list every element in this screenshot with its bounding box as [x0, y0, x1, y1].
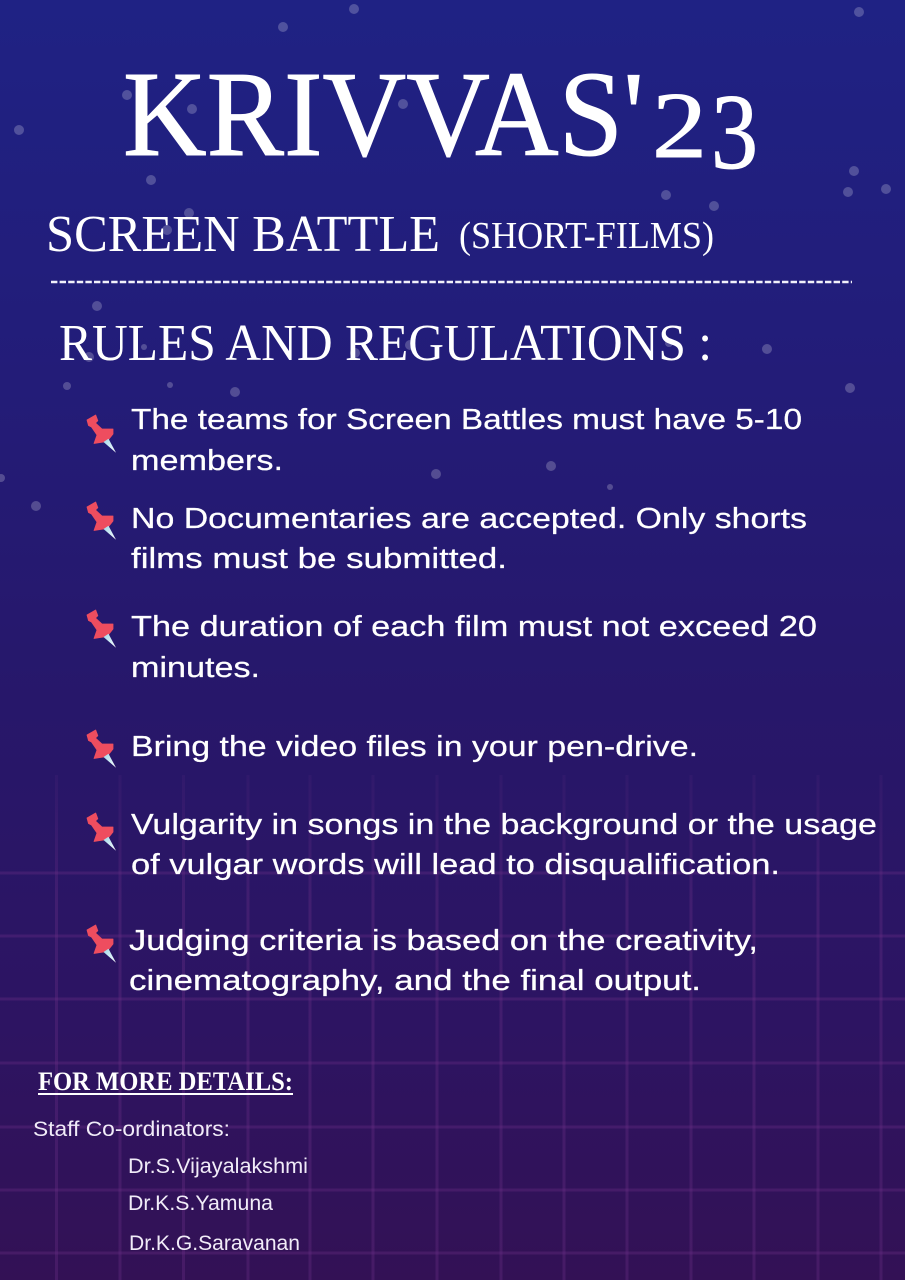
rule 3: The duration of each film must not exceed 20 — [131, 611, 817, 643]
background dots — [0, 4, 891, 511]
staff coordinators: Dr.K.G.Saravanan — [129, 1232, 300, 1255]
rule 1: The teams for Screen Battles must have 5-10 — [131, 404, 802, 436]
subtitle: screen battle — [46, 206, 714, 263]
rule 6: cinematography, and the final output. — [129, 965, 701, 997]
rule 2: films must be submitted. — [131, 543, 507, 575]
title: KRIVVAS' — [123, 47, 644, 182]
rule 3: minutes. — [131, 652, 260, 684]
heading: rules and regulations: RULES AND REGULATIONS : — [59, 315, 712, 372]
rule 1: members. — [131, 445, 283, 477]
rule 5: Vulgarity in songs in the background or the usage — [131, 809, 877, 841]
background grid — [0, 775, 905, 1280]
rule 2 — [87, 502, 807, 575]
staff coordinators — [33, 1118, 308, 1255]
staff coordinators: Dr.K.S.Yamuna — [128, 1192, 273, 1215]
title: 2 — [652, 74, 707, 178]
staff coordinators: Staff Co-ordinators: — [33, 1118, 230, 1141]
rule 4 — [87, 730, 698, 768]
staff coordinators: Dr.S.Vijayalakshmi — [128, 1155, 308, 1178]
subtitle: screen battle: SCREEN BATTLE — [46, 206, 440, 263]
rule 5 — [87, 809, 877, 881]
rule 5: of vulgar words will lead to disqualification. — [131, 849, 780, 881]
title: 3 — [711, 73, 758, 192]
rule 4: Bring the video files in your pen-drive. — [131, 731, 698, 763]
heading: for more details: FOR MORE DETAILS: — [38, 1067, 293, 1096]
rule 6 — [87, 925, 758, 997]
rule 2: No Documentaries are accepted. Only shorts — [131, 503, 807, 535]
rule 1 — [87, 404, 802, 477]
rule 3 — [87, 610, 817, 684]
rule 6: Judging criteria is based on the creativity, — [129, 925, 758, 957]
subtitle: screen battle: (SHORT-FILMS) — [459, 215, 714, 257]
